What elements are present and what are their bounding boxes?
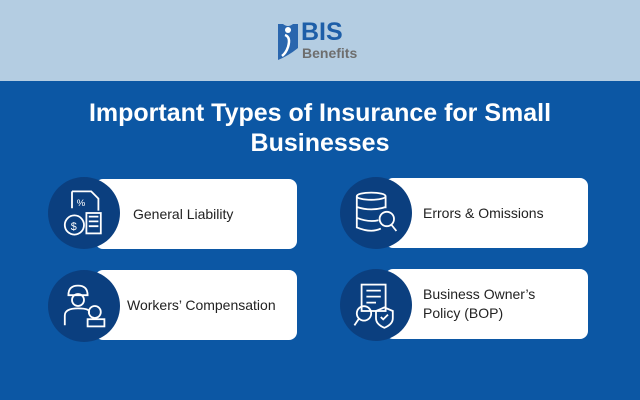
header band <box>0 0 640 81</box>
card: errors & omissions <box>385 178 588 248</box>
card: errors & omissions: Errors & Omissions <box>423 205 544 221</box>
logo text: BIS <box>301 18 343 46</box>
title <box>89 99 551 157</box>
icon: general liability: % <box>77 198 86 209</box>
icon: general liability: $ <box>71 221 77 233</box>
icon: general liability <box>48 177 120 249</box>
card: general liability <box>95 179 297 249</box>
icon: errors & omissions <box>340 177 412 249</box>
card: business owner's policy: Business Owner’s <box>423 286 535 302</box>
card: business owner's policy <box>385 269 588 339</box>
icon: logo mark <box>278 24 298 60</box>
title: Businesses <box>251 129 389 157</box>
card: workers' compensation: Workers’ Compensation <box>127 297 276 313</box>
logo: Benefits <box>302 45 357 61</box>
icon: BOP <box>340 269 412 341</box>
title: Important Types of Insurance for Small <box>89 99 551 127</box>
card: general liability: General Liability <box>133 206 233 222</box>
logo <box>278 18 357 61</box>
card: workers' compensation <box>95 270 297 340</box>
icon: workers compensation <box>48 270 120 342</box>
card: business owner's policy: Policy (BOP) <box>423 305 503 321</box>
